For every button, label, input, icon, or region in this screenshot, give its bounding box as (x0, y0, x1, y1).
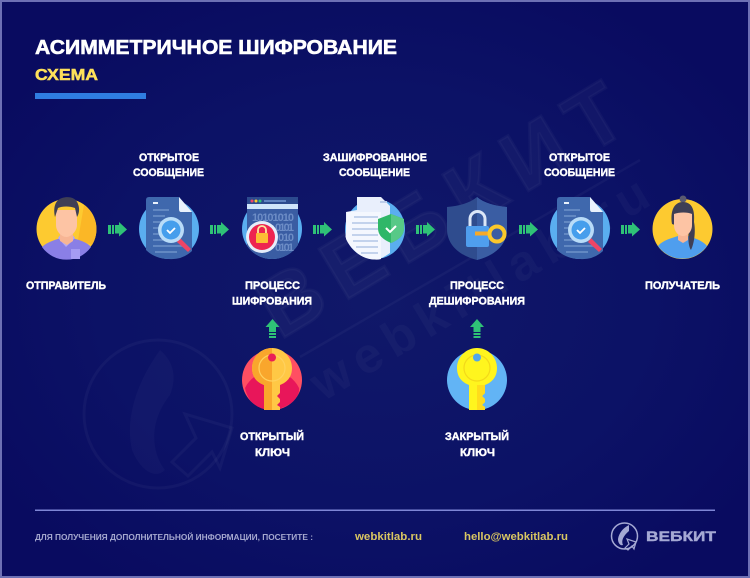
icon: encryption process: 010 (278, 232, 294, 244)
arrow 6 (621, 222, 640, 236)
icon: encryption process: 0101 (275, 222, 294, 234)
label: open message 2: ОТКРЫТОЕ (549, 152, 610, 164)
title: АСИММЕТРИЧНОЕ ШИФРОВАНИЕ (35, 37, 397, 59)
icon: open message 1 (139, 197, 199, 259)
label: decryption process: ПРОЦЕСС (450, 280, 504, 292)
label: encrypted message: ЗАШИФРОВАННОЕ (323, 152, 427, 164)
label: public key: ОТКРЫТЫЙ (240, 430, 304, 443)
watermark: ВЕБКИТ (241, 64, 641, 355)
label: encryption process (232, 280, 312, 308)
footer divider (35, 510, 715, 511)
arrow 1 (108, 222, 127, 236)
icon: open message 2 (550, 197, 610, 259)
label: decryption process: ДЕШИФРОВАНИЯ (429, 296, 525, 308)
arrow up: private key (470, 319, 484, 338)
watermark: webkitlab.ru (299, 165, 659, 412)
label: encrypted message: СООБЩЕНИЕ (339, 167, 410, 179)
icon: decryption process (447, 197, 507, 260)
label: open message 2 (544, 152, 615, 179)
label: open message 1 (133, 152, 204, 179)
label: sender: ОТПРАВИТЕЛЬ (26, 280, 106, 292)
footer email: hello@webkitlab.ru (464, 531, 568, 543)
icon: sender (36, 197, 96, 260)
label: encryption process: ШИФРОВАНИЯ (232, 296, 312, 308)
arrow 4 (416, 222, 435, 236)
footer note: ДЛЯ ПОЛУЧЕНИЯ ДОПОЛНИТЕЛЬНОЙ ИНФОРМАЦИИ, ПОСЕТИТЕ : (35, 533, 313, 542)
label: open message 2: СООБЩЕНИЕ (544, 167, 615, 179)
watermark (84, 64, 659, 488)
label: public key: КЛЮЧ (255, 447, 290, 459)
label: private key: КЛЮЧ (460, 447, 495, 459)
label: private key (445, 430, 509, 459)
label: open message 1: ОТКРЫТОЕ (139, 152, 199, 164)
arrow 3 (313, 222, 332, 236)
label: encryption process: ПРОЦЕСС (245, 280, 300, 292)
label: open message 1: СООБЩЕНИЕ (133, 167, 204, 179)
footer logo (612, 523, 717, 550)
arrow 2 (210, 222, 229, 236)
arrow 5 (519, 222, 538, 236)
icon: encryption process: 0101 (275, 242, 294, 254)
label: encrypted message (323, 152, 427, 179)
label: recipient: ПОЛУЧАТЕЛЬ (645, 280, 720, 292)
icon: encryption process: 10101010 (252, 212, 294, 224)
label: public key (240, 430, 304, 459)
icon: encrypted message (345, 197, 405, 260)
title accent bar (35, 93, 146, 99)
footer website: webkitlab.ru (354, 531, 422, 543)
footer logo: ВЕБКИТ (646, 528, 717, 544)
subtitle: СХЕМА (35, 67, 98, 84)
icon: recipient (652, 196, 712, 259)
icon: private key (447, 348, 507, 410)
icon: encryption process (242, 197, 302, 259)
icon: public key (242, 348, 302, 410)
label: private key: ЗАКРЫТЫЙ (445, 430, 509, 443)
label: decryption process (429, 280, 525, 308)
arrow up: public key (266, 319, 280, 338)
